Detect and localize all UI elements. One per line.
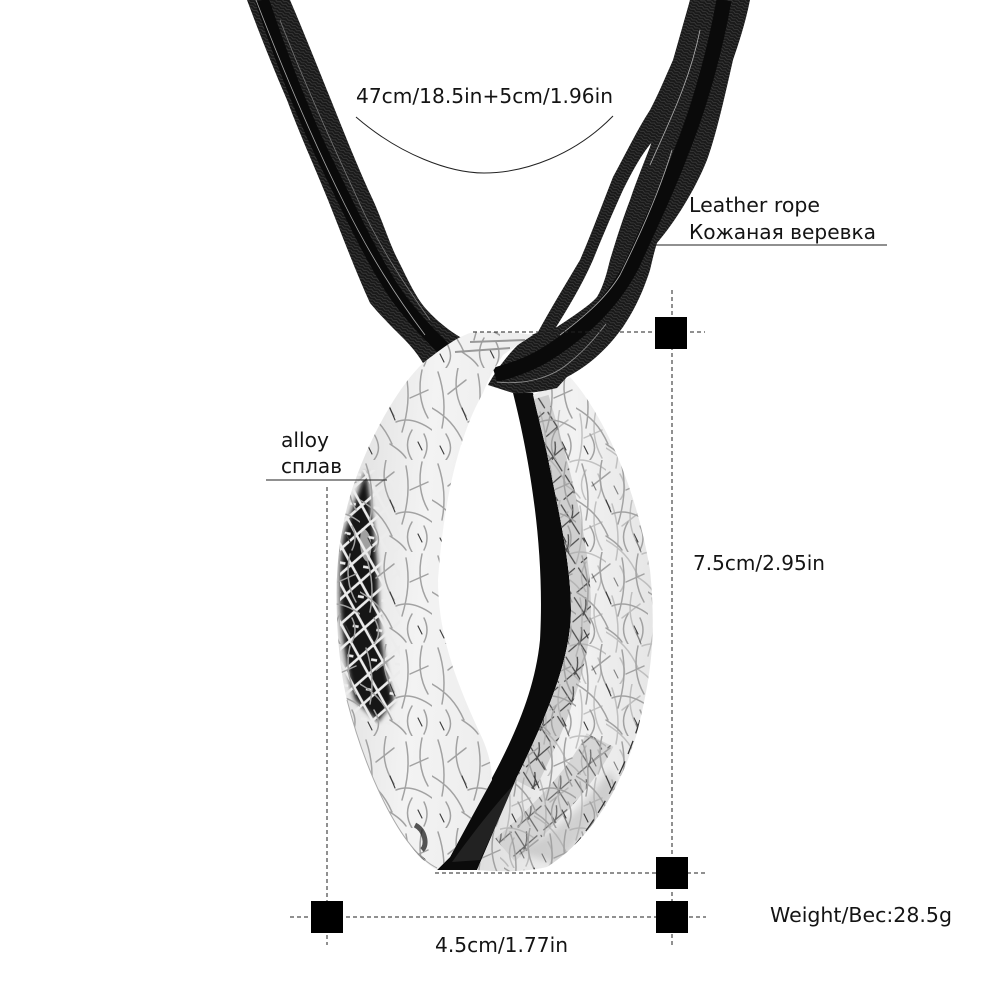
dimension: pendant height: [435, 290, 825, 945]
dimension: necklace length: [356, 84, 613, 173]
callout: leather rope: Leather rope: [689, 193, 820, 217]
callout: alloy: [266, 428, 387, 480]
callout: leather rope: [655, 193, 887, 245]
weight label: Weight/Bec:28.5g: [770, 903, 952, 927]
dimension: pendant width: [290, 487, 706, 957]
necklace cords: inner right strand: [538, 0, 700, 332]
pendant: black enamel band: [437, 393, 571, 870]
callout: leather rope: Кожаная веревка: [689, 220, 876, 244]
callout: alloy: alloy: [281, 428, 329, 452]
necklace cords: left bundle: [247, 0, 485, 363]
pendant: right silver band: [477, 377, 653, 872]
dimension: necklace length: 47cm/18.5in+5cm/1.96in: [356, 84, 613, 108]
dimension: pendant width: 4.5cm/1.77in: [435, 933, 568, 957]
dimension: pendant height: 7.5cm/2.95in: [693, 551, 825, 575]
pendant: left silver band: [330, 330, 533, 880]
necklace cords: right bundle and knot: [488, 0, 750, 393]
callout: alloy: сплав: [281, 454, 342, 478]
